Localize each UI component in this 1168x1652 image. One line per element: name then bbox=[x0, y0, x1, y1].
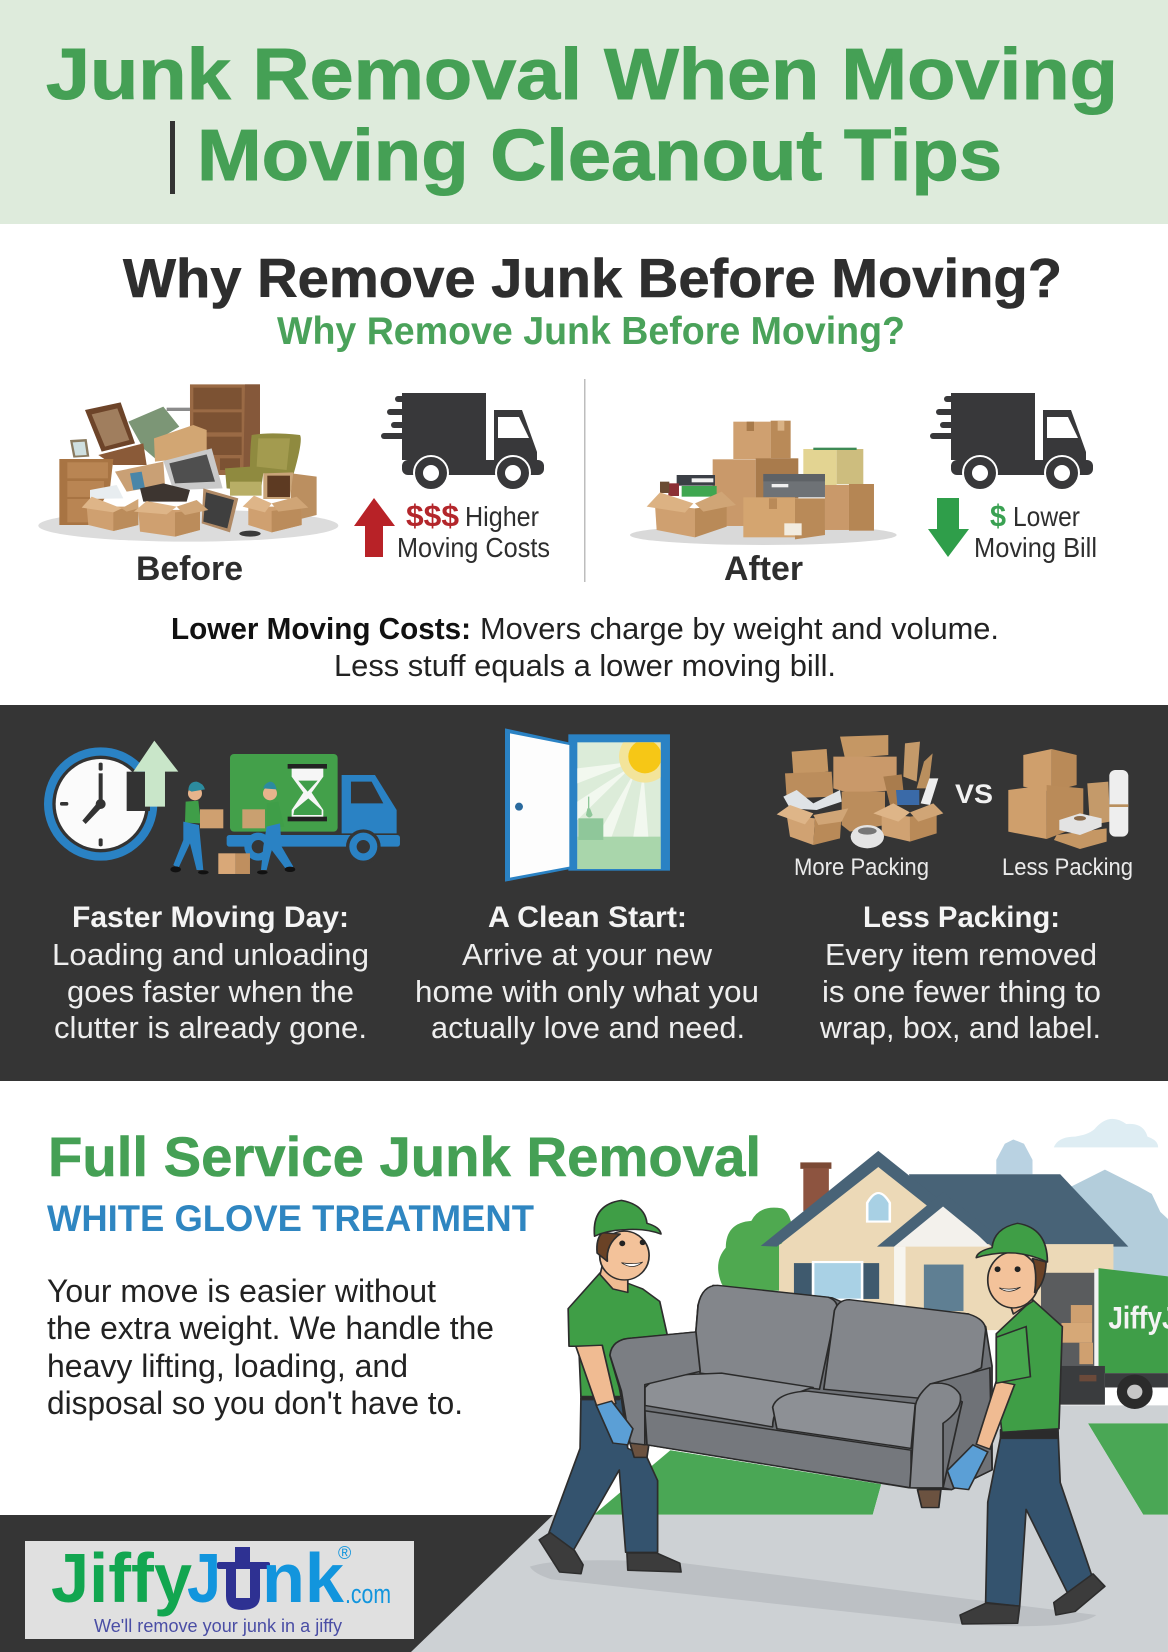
house bbox=[761, 1151, 1128, 1330]
logo: jiffy junk: ® bbox=[338, 1543, 351, 1563]
right mover bbox=[960, 1223, 1105, 1624]
text block: service description: disposal so you don't have to. bbox=[47, 1385, 463, 1421]
logo: jiffy junk: J bbox=[187, 1539, 221, 1617]
text: less packing: wrap, box, and label. bbox=[819, 1010, 1101, 1045]
label: lower moving bill: Moving Bill bbox=[974, 532, 1097, 563]
scene: house, truck, lawn, movers and sofa bbox=[411, 1119, 1168, 1652]
text block: service description: Your move is easier without bbox=[47, 1273, 436, 1309]
label: lower moving bill: Lower bbox=[1013, 501, 1080, 532]
right forearm over sofa bbox=[976, 1381, 1015, 1449]
section heading: why remove junk: Why Remove Junk Before Moving? bbox=[123, 247, 1062, 309]
bush bbox=[718, 1208, 795, 1291]
section heading: why remove junk: Why Remove Junk Before Moving? bbox=[277, 310, 905, 353]
logo: jiffy junk: Jiffy bbox=[51, 1539, 192, 1617]
labels: more and less packing: Less Packing bbox=[1002, 854, 1133, 881]
dark footer corner bbox=[0, 1515, 553, 1652]
illustration: before junk pile bbox=[38, 384, 338, 542]
right glove over sofa bbox=[947, 1445, 988, 1490]
icon: truck, lower cost bbox=[930, 393, 1093, 490]
icon: more packing boxes bbox=[777, 735, 943, 848]
label: higher moving costs: Higher bbox=[465, 501, 539, 532]
arrow up, higher cost bbox=[354, 498, 395, 557]
header band with title: Junk Removal When Moving bbox=[46, 35, 1118, 115]
label: before: Before bbox=[136, 550, 243, 588]
text: a clean start: A Clean Start: bbox=[488, 901, 687, 934]
label: higher moving costs: $$$ bbox=[406, 498, 459, 533]
text: a clean start: home with only what you bbox=[415, 974, 759, 1009]
icon: less packing boxes bbox=[1008, 749, 1128, 849]
text: a clean start: actually love and need. bbox=[431, 1010, 745, 1045]
truck bbox=[1041, 1268, 1168, 1409]
label: after: After bbox=[724, 550, 803, 588]
arrow down, lower bill bbox=[928, 498, 969, 557]
dark band bbox=[0, 705, 1168, 1081]
label: higher moving costs: Moving Costs bbox=[397, 532, 550, 563]
section heading: full service junk removal: WHITE GLOVE TREATMENT bbox=[47, 1198, 534, 1239]
text block: service description bbox=[47, 1273, 494, 1421]
logo: jiffy junk: We'll remove your junk in a jiffy bbox=[94, 1616, 342, 1636]
label: lower moving bill bbox=[974, 498, 1097, 563]
left mover bbox=[539, 1200, 681, 1574]
label: vs: VS bbox=[955, 779, 993, 809]
label: lower moving bill: $ bbox=[990, 498, 1006, 533]
header band with title bbox=[0, 0, 1168, 224]
section heading: full service junk removal bbox=[47, 1125, 761, 1239]
text: faster moving day: clutter is already gone. bbox=[54, 1010, 367, 1045]
text: faster moving day bbox=[52, 901, 369, 1045]
text block: lower moving costs bbox=[171, 611, 999, 683]
sofa bbox=[610, 1285, 992, 1508]
icon: open door with sunlight bbox=[505, 728, 671, 882]
labels: more and less packing: More Packing bbox=[794, 854, 929, 881]
text: less packing: is one fewer thing to bbox=[822, 974, 1101, 1009]
text: faster moving day: Faster Moving Day: bbox=[72, 901, 349, 934]
background: cloud and skyline bbox=[996, 1119, 1168, 1276]
left mover face bbox=[619, 1239, 646, 1267]
text: less packing: Every item removed bbox=[825, 937, 1097, 972]
text: faster moving day: goes faster when the bbox=[67, 974, 354, 1009]
illustration: after tidy boxes bbox=[630, 421, 897, 545]
divider bbox=[584, 379, 586, 582]
section heading: why remove junk bbox=[123, 247, 1062, 353]
logo: jiffy junk: .com bbox=[345, 1579, 391, 1609]
text: less packing: Less Packing: bbox=[863, 901, 1060, 934]
labels: more and less packing bbox=[794, 854, 1133, 881]
lawn and road bbox=[411, 1405, 1168, 1652]
logo: jiffy junk: nk bbox=[262, 1539, 344, 1617]
text: less packing bbox=[819, 901, 1101, 1045]
icon: clock, arrow and loading truck bbox=[44, 741, 400, 874]
text block: lower moving costs: Movers charge by weight and volume. bbox=[480, 611, 999, 646]
text: a clean start bbox=[415, 901, 759, 1045]
section heading: full service junk removal: Full Service Junk Removal bbox=[48, 1125, 761, 1188]
text: a clean start: Arrive at your new bbox=[462, 937, 713, 972]
right sleeve bbox=[996, 1327, 1030, 1383]
text block: service description: heavy lifting, loading, and bbox=[47, 1348, 408, 1384]
logo: jiffy junk bbox=[25, 1539, 414, 1639]
text block: lower moving costs: Lower Moving Costs: bbox=[171, 611, 471, 646]
text: faster moving day: Loading and unloading bbox=[52, 937, 369, 972]
header band with title: Moving Cleanout Tips bbox=[197, 116, 1002, 196]
label: higher moving costs bbox=[397, 498, 550, 563]
right mover face bbox=[995, 1266, 1021, 1291]
text block: lower moving costs: Less stuff equals a lower moving bill. bbox=[334, 648, 836, 683]
text block: service description: the extra weight. We handle the bbox=[47, 1310, 494, 1346]
left glove over sofa bbox=[596, 1401, 633, 1445]
icon: truck, higher cost bbox=[381, 393, 544, 490]
